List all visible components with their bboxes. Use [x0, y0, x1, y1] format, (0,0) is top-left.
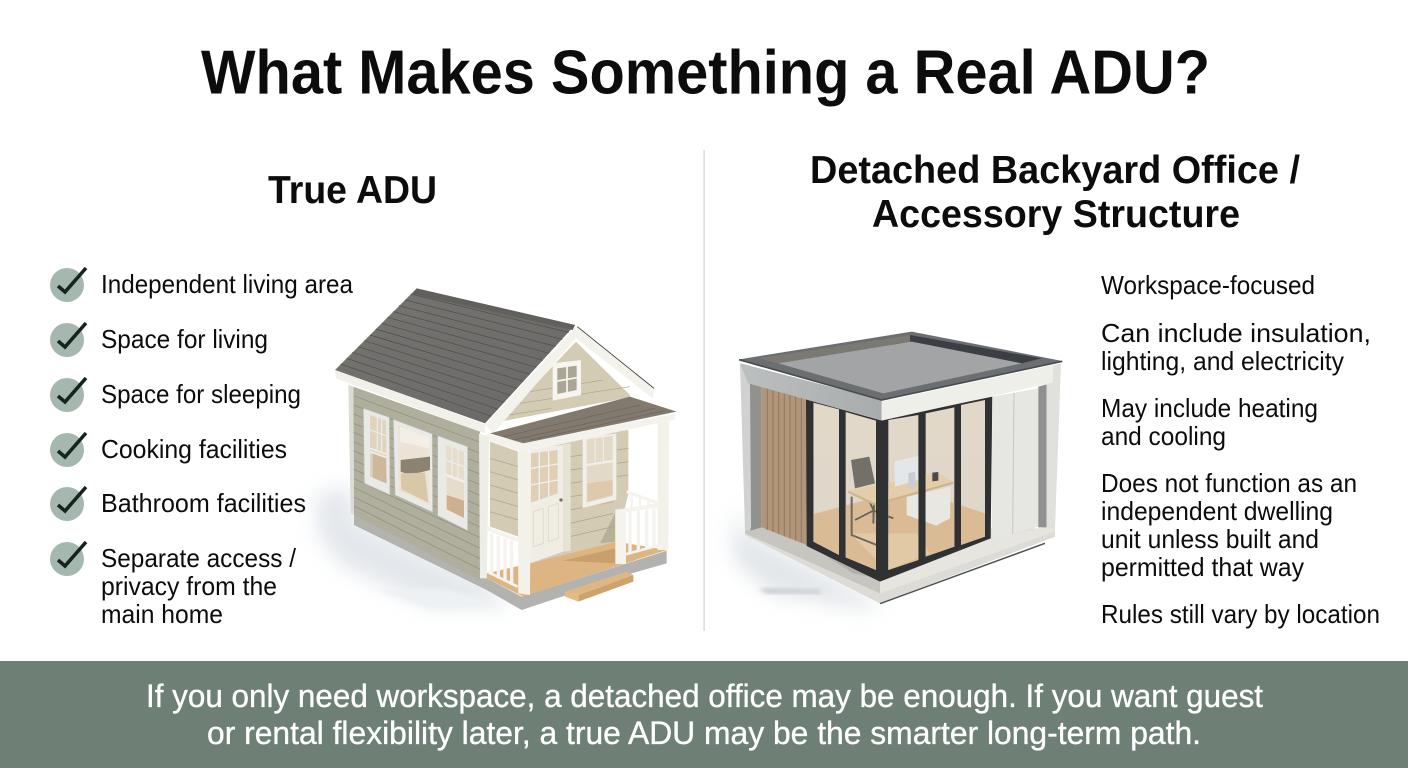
office chair [851, 457, 893, 523]
illustration: ADU house [317, 288, 677, 610]
porch deck [487, 542, 667, 597]
feature: heating and cooling [1101, 393, 1318, 451]
heading: true ADU: True ADU [268, 169, 437, 212]
feature: rules vary: Rules still vary by location [1101, 599, 1380, 629]
takeaway banner: or rental flexibility later, a true ADU may be the smarter long-term path. [207, 715, 1201, 751]
porch roof [487, 397, 677, 452]
office floor [813, 491, 985, 570]
check item: independent living area [50, 268, 353, 302]
check item: separate access: main home [101, 599, 223, 629]
porch posts [479, 422, 669, 595]
title: What Makes Something a Real ADU? [201, 38, 1210, 108]
feature: insulation and lighting: lighting, and electricity [1101, 346, 1344, 376]
check item: space for living [50, 323, 268, 357]
takeaway banner: If you only need workspace, a detached office may be enough. If you want guest [146, 678, 1263, 714]
porch steps [565, 572, 633, 602]
panel: true ADU [50, 169, 677, 629]
flat roof [739, 332, 1062, 400]
porch railings [487, 492, 667, 587]
base slab [745, 527, 1055, 604]
left recess and wood cladding [740, 363, 807, 545]
feature: insulation and lighting: Can include insulation, [1101, 318, 1371, 348]
porch window [582, 433, 617, 508]
checklist [50, 268, 353, 629]
feature: not a dwelling: Does not function as an [1101, 468, 1357, 498]
door [530, 443, 571, 563]
heading: detached office: Accessory Structure [872, 193, 1240, 236]
feature: heating and cooling: May include heating [1101, 393, 1318, 423]
check item: separate access: Separate access / [101, 543, 297, 573]
check item: bathroom facilities: Bathroom facilities [101, 488, 306, 518]
desk with monitor [848, 456, 953, 545]
check item: separate access [50, 542, 297, 629]
check item: cooking facilities [50, 433, 287, 467]
takeaway banner [0, 661, 1408, 768]
feature: insulation and lighting [1101, 318, 1371, 376]
check item: space for living: Space for living [101, 324, 268, 354]
interior view [813, 400, 985, 570]
gable [500, 342, 630, 422]
main roof [335, 288, 575, 433]
feature: not a dwelling [1101, 468, 1357, 582]
glazing frames [806, 397, 992, 582]
white side panel [992, 363, 1061, 540]
check item: space for sleeping [50, 378, 301, 412]
porch back walls [490, 430, 628, 563]
feature: not a dwelling: unit unless built and [1101, 524, 1319, 554]
check item: separate access: privacy from the [101, 571, 277, 601]
panel: detached backyard office [733, 149, 1380, 629]
gable trim [485, 327, 654, 433]
feature: not a dwelling: permitted that way [1101, 552, 1304, 582]
heading: detached office: Detached Backyard Office / [810, 149, 1300, 192]
ground shadow [317, 487, 510, 608]
illustration: backyard office [733, 332, 1062, 610]
feature: workspace-focused: Workspace-focused [1101, 270, 1315, 300]
feature list [1101, 270, 1380, 629]
check item: cooking facilities: Cooking facilities [101, 434, 287, 464]
check item: independent living area: Independent living area [101, 269, 353, 299]
heading: detached office [810, 149, 1300, 236]
feature: not a dwelling: independent dwelling [1101, 496, 1333, 526]
side wall [348, 385, 480, 580]
side windows [363, 408, 468, 531]
fascia [740, 363, 1053, 421]
check item: bathroom facilities [50, 487, 306, 521]
divider [704, 150, 705, 631]
foundation [354, 515, 667, 610]
check item: space for sleeping: Space for sleeping [101, 379, 301, 409]
feature: heating and cooling: and cooling [1101, 421, 1226, 451]
ground shadow [733, 507, 880, 610]
